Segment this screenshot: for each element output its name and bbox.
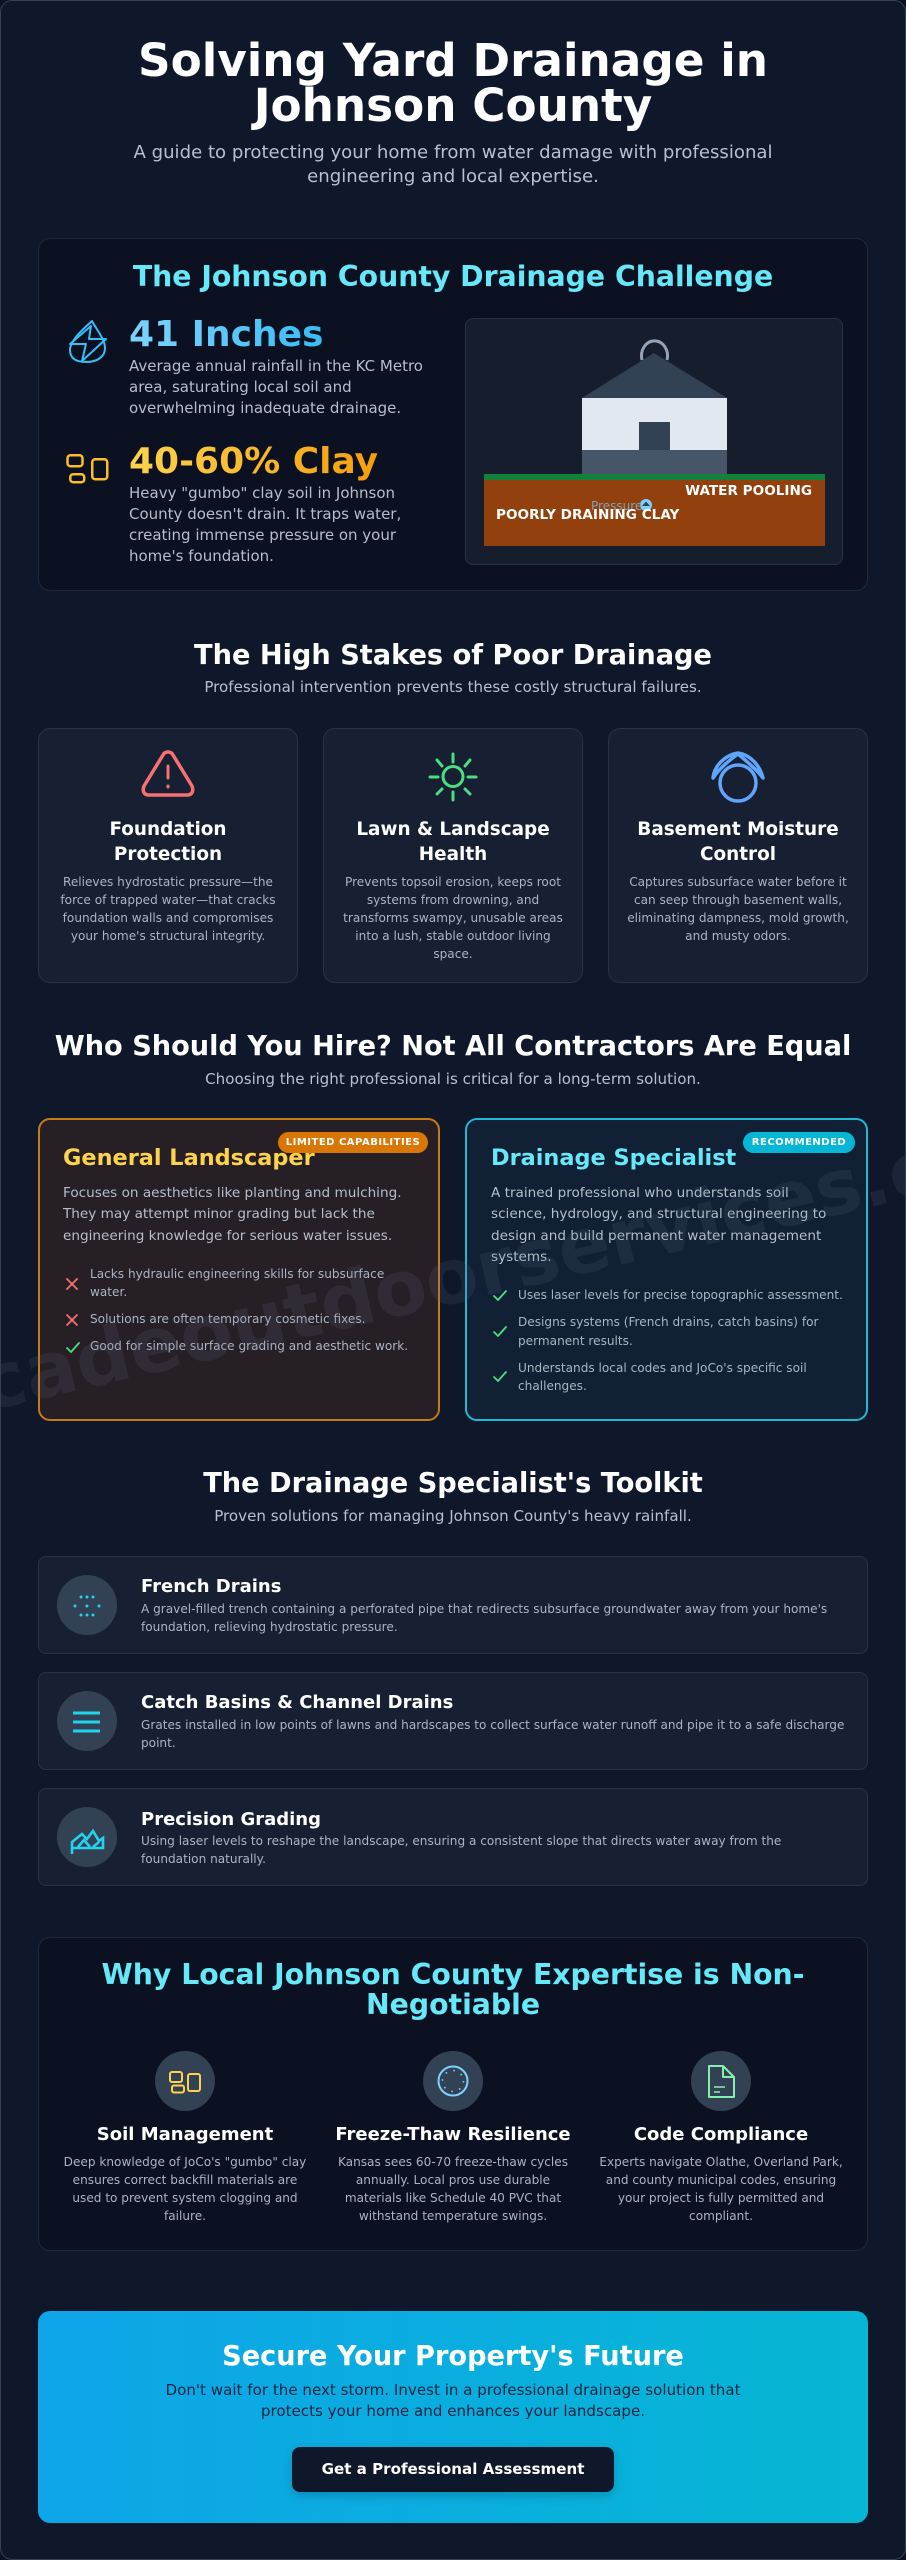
card text: basement [627, 874, 849, 943]
panel: call to action [38, 2311, 868, 2523]
stat description: clay [129, 484, 401, 565]
tool title: french drains: French Drains [141, 1576, 281, 1597]
subtitle [133, 142, 773, 186]
column text: code compliance [599, 2155, 843, 2223]
tool text: precision grading: foundation naturally. [141, 1852, 266, 1866]
tool text: catch basins: Grates installed in low points of lawns and hardscapes to collect surface water runoff and pipe it to a safe discharge [141, 1718, 844, 1732]
panel text: specialist: A trained professional who understands soil [491, 1185, 789, 1201]
heading: toolkit: The Drainage Specialist's Toolkit [203, 1468, 703, 1499]
diagram: house on clay soil [465, 318, 843, 565]
column text: soil management [64, 2155, 306, 2223]
column text: freeze-thaw: materials like Schedule 40 PVC that [345, 2191, 561, 2205]
list: landscaper limitations [90, 1267, 408, 1353]
diagram drawing [484, 339, 825, 546]
card: basement moisture [608, 728, 868, 983]
infographic container: Good for simple surface grading and aesthetic work. [90, 1339, 408, 1353]
subtitle: engineering and local expertise. [307, 166, 599, 186]
title: Solving Yard Drainage in [138, 34, 768, 86]
card: foundation protection [38, 728, 298, 983]
list: landscaper limitations: Lacks hydraulic engineering skills for subsurface [90, 1267, 384, 1281]
tool text: catch basins: point. [141, 1736, 176, 1750]
card title: lawn [356, 819, 550, 865]
freeze-thaw glyph [438, 2066, 468, 2096]
text: call to action [165, 2381, 740, 2420]
text: call to action: protects your home and enhances your landscape. [261, 2402, 645, 2420]
card text: lawn: space. [433, 947, 473, 961]
tool text: french drains [141, 1602, 827, 1634]
stat description: rainfall: Average annual rainfall in the KC Metro [129, 357, 423, 375]
icons: landscaper list marks [66, 1278, 80, 1353]
card text: foundation: force of trapped water—that cracks [60, 893, 276, 907]
icon: code compliance [691, 2051, 751, 2111]
list: specialist strengths: Uses laser levels for precise topographic assessment. [518, 1288, 843, 1302]
badge: recommended: RECOMMENDED [752, 1137, 846, 1148]
title [138, 34, 768, 132]
card: lawn health [323, 728, 583, 983]
column text: soil management: used to prevent system clogging and [72, 2191, 298, 2205]
stat description: clay: Heavy "gumbo" clay soil in Johnson [129, 484, 395, 502]
column title: freeze-thaw: Freeze-Thaw Resilience [335, 2124, 571, 2145]
card title: lawn: Lawn & Landscape [356, 819, 550, 840]
infographic container: Solutions are often temporary cosmetic fixes. [90, 1312, 366, 1326]
card text: foundation: Relieves hydrostatic pressure—the [63, 874, 273, 888]
icon: sun [428, 752, 478, 802]
panel text: landscaper: engineering knowledge for serious water issues. [63, 1228, 392, 1244]
text: call to action: Don't wait for the next storm. Invest in a professional drainage solution that [165, 2381, 740, 2399]
card text: lawn: Prevents topsoil erosion, keeps root [345, 874, 561, 888]
card text: basement: can seep through basement walls, [634, 893, 842, 907]
list: landscaper limitations: water. [90, 1285, 127, 1299]
button: assessment: Get a Professional Assessment [322, 2460, 584, 2478]
panel: drainage challenge [38, 238, 868, 591]
card title: lawn: Health [419, 844, 487, 865]
card title: foundation [109, 819, 227, 865]
card text: foundation: foundation walls and compromises [63, 911, 273, 925]
badge: limited capabilities: LIMITED CAPABILITIES [286, 1137, 420, 1148]
icon lines [73, 1712, 100, 1732]
card text: basement: and musty odors. [685, 929, 791, 943]
tool text: french drains: foundation, relieving hydrostatic pressure. [141, 1620, 398, 1634]
column text: freeze-thaw: withstand temperature swings. [359, 2209, 547, 2223]
card text: lawn: systems from drowning, and [367, 893, 539, 907]
diagram drawing: POORLY DRAINING CLAY [496, 507, 680, 523]
card text: lawn: transforms swampy, unusable areas [343, 911, 563, 925]
icon: rain and bolt [69, 320, 107, 363]
column text: soil management: Deep knowledge of JoCo's "gumbo" clay [64, 2155, 306, 2169]
card text: lawn: into a lush, stable outdoor living [355, 929, 551, 943]
column title: code compliance: Code Compliance [634, 2124, 808, 2145]
stat description: rainfall: overwhelming inadequate drainage. [129, 399, 401, 417]
column text: freeze-thaw: Kansas sees 60-70 freeze-thaw cycles [338, 2155, 568, 2169]
column text: code compliance: Experts navigate Olathe, Overland Park, [599, 2155, 843, 2169]
card text: foundation [60, 874, 276, 943]
heading: challenge: The Johnson County Drainage Challenge [133, 260, 773, 292]
panel text: specialist: design and build permanent water management [491, 1228, 821, 1244]
stat description: clay: home's foundation. [129, 547, 274, 565]
card title: basement [637, 819, 839, 865]
card text: basement: Captures subsurface water before it [629, 874, 847, 888]
tool text: french drains: A gravel-filled trench containing a perforated pipe that redirects subsurface groundwater away from your home's [141, 1602, 827, 1616]
icon: grading [57, 1807, 117, 1867]
infographic container: Understands local codes and JoCo's specific soil [518, 1361, 807, 1375]
tool title: precision grading: Precision Grading [141, 1808, 321, 1830]
panel: general landscaper [38, 1118, 440, 1421]
heading: high stakes: The High Stakes of Poor Drainage [194, 640, 712, 670]
stat description: clay: County doesn't drain. It traps water, [129, 505, 401, 523]
tool text: precision grading: Using laser levels to reshape the landscape, ensuring a consistent slope that directs water away from the [141, 1834, 781, 1848]
panel: drainage specialist [465, 1118, 868, 1421]
panel text: specialist [491, 1185, 826, 1265]
panel text: landscaper: Focuses on aesthetics like planting and mulching. [63, 1185, 402, 1201]
infographic container: Designs systems (French drains, catch basins) for [518, 1315, 818, 1329]
heading: who to hire: Who Should You Hire? Not All Contractors Are Equal [55, 1031, 851, 1062]
icon: french drain [57, 1575, 117, 1635]
card text: lawn [343, 874, 563, 961]
subheading: who to hire: Choosing the right professional is critical for a long-term solution. [205, 1070, 701, 1088]
tool text: precision grading [141, 1834, 781, 1866]
icon: basement moisture [711, 751, 765, 803]
panel text: specialist: systems. [491, 1249, 552, 1265]
panel text: specialist: science, hydrology, and structural engineering to [491, 1206, 826, 1222]
card title: basement: Control [700, 844, 776, 865]
column text: freeze-thaw: annually. Local pros use durable [356, 2173, 550, 2187]
subheading: high stakes: Professional intervention prevents these costly structural failures. [204, 678, 702, 696]
icon: warning [141, 750, 194, 797]
button: assessment [292, 2447, 614, 2492]
infographic container: permanent results. [518, 1334, 633, 1348]
soil management glyph [169, 2071, 201, 2094]
stat description: rainfall [129, 357, 423, 417]
icon: catch basin [57, 1691, 117, 1751]
panel text: landscaper: They may attempt minor grading but lack the [63, 1206, 375, 1222]
column text: code compliance: compliant. [689, 2209, 753, 2223]
icon: soil management [155, 2051, 215, 2111]
stat description: clay: creating immense pressure on your [129, 526, 396, 544]
card title: foundation: Foundation [109, 819, 227, 840]
icon mountains [70, 1828, 104, 1854]
card title: foundation: Protection [114, 844, 222, 865]
panel: local expertise [38, 1937, 868, 2251]
tool text: catch basins [141, 1718, 844, 1750]
heading: call to action: Secure Your Property's Future [222, 2341, 684, 2372]
column text: soil management: failure. [164, 2209, 206, 2223]
card text: basement: eliminating dampness, mold growth, [627, 911, 849, 925]
column text: soil management: ensures correct backfill materials are [73, 2173, 297, 2187]
subheading: toolkit: Proven solutions for managing Johnson County's heavy rainfall. [214, 1507, 692, 1525]
panel text: landscaper [62, 1185, 402, 1244]
icon: clay blocks [66, 454, 108, 484]
card: precision grading [38, 1788, 868, 1886]
stat: clay percentage: 40-60% Clay [129, 440, 378, 482]
column title: soil management: Soil Management [97, 2124, 273, 2145]
icon: freeze-thaw [423, 2051, 483, 2111]
tool title: catch basins: Catch Basins & Channel Drains [141, 1692, 453, 1713]
card text: foundation: your home's structural integrity. [71, 929, 265, 943]
list: specialist strengths [518, 1288, 843, 1393]
heading: local expertise [102, 1958, 804, 2021]
card: french drains [38, 1556, 868, 1654]
badge: limited capabilities [278, 1132, 428, 1153]
stat description: rainfall: area, saturating local soil and [129, 378, 352, 396]
icons: specialist checks [493, 1290, 507, 1382]
column text: freeze-thaw [338, 2155, 568, 2223]
subtitle: A guide to protecting your home from water damage with professional [133, 142, 773, 162]
infographic container: challenges. [518, 1379, 587, 1393]
icon dots [74, 1596, 100, 1616]
diagram drawing: Pressure [591, 499, 642, 513]
column text: code compliance: and county municipal codes, ensuring [606, 2173, 836, 2187]
stat: 41 inches: 41 Inches [129, 314, 323, 355]
heading: local expertise: Negotiable [366, 1988, 540, 2021]
title: Johnson County [254, 79, 652, 132]
card: catch basins [38, 1672, 868, 1770]
code compliance glyph [708, 2065, 735, 2098]
heading: local expertise: Why Local Johnson County Expertise is Non- [102, 1958, 804, 1991]
column text: code compliance: your project is fully permitted and [618, 2191, 824, 2205]
panel title: drainage specialist: Drainage Specialist [491, 1144, 736, 1170]
panel title: general landscaper: General Landscaper [63, 1144, 315, 1170]
diagram drawing: WATER POOLING [685, 483, 812, 499]
badge: recommended [743, 1132, 855, 1153]
card title: basement: Basement Moisture [637, 819, 839, 840]
